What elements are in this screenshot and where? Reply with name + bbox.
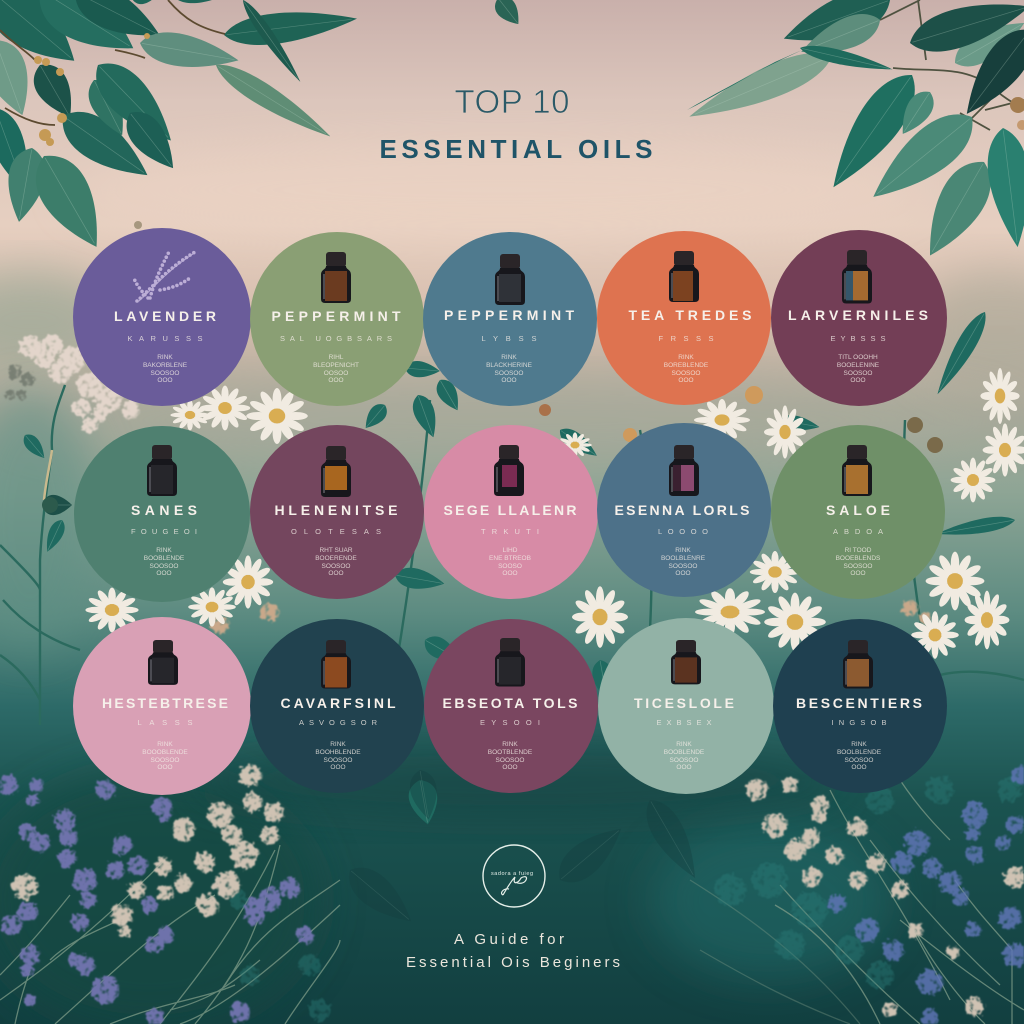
panel: Hestebtrese: RINK xyxy=(157,741,173,748)
panel: Sanes: SANES xyxy=(131,502,197,518)
panel: Cavarfsinl: SOOSOO xyxy=(324,757,352,764)
subtitle: Essential Ois Beginers xyxy=(406,954,620,971)
panel: Ebseota Tols: EYSOOI xyxy=(480,718,540,727)
panel: Ebseota Tols: EBSEOTA TOLS xyxy=(442,695,578,711)
panel: Bescentiers: BESCENTIERS xyxy=(796,695,922,711)
panel: Sege Llalenr: TRKUTI xyxy=(481,527,539,536)
panel: Peppermint green: OOSOO xyxy=(324,370,348,377)
panel: Bescentiers: BOOLBLENDE xyxy=(837,749,882,756)
panel: Ticeslole: TICESLOLE xyxy=(634,695,734,711)
panel: Tea Tree: OOO xyxy=(678,377,694,384)
panel: Saloe: RI TOOD xyxy=(845,547,872,554)
panel: Tea Tree: RINK xyxy=(678,354,694,361)
panel: Saloe: BOOEBLENDS xyxy=(836,555,881,562)
panel: Hlenenitse: OLOTESAS xyxy=(291,527,381,536)
panel: Saloe xyxy=(771,425,945,599)
panel: Lavender: KARUSSS xyxy=(128,334,202,343)
panel: Larverniles: LARVERNILES xyxy=(788,307,928,323)
panel: Peppermint green: RIHL xyxy=(329,354,344,361)
panel: Cavarfsinl: RINK xyxy=(330,741,346,748)
subtitle xyxy=(406,931,620,971)
panel: Cavarfsinl: OOO xyxy=(330,764,346,771)
logo: circular emblem: sadora a fuieg xyxy=(491,871,533,877)
icon: amber bottle xyxy=(321,640,351,688)
panel: Ebseota Tols: BOOTBLENDE xyxy=(488,749,533,756)
icon: plum label bottle xyxy=(494,445,524,496)
panel: Ebseota Tols xyxy=(424,619,598,793)
panel: Sanes: FOUGEOI xyxy=(131,527,197,536)
panel: Peppermint green: PEPPERMINT xyxy=(272,308,401,324)
panel: Peppermint blue: OOO xyxy=(501,377,517,384)
panel: Hestebtrese: LASSS xyxy=(138,718,192,727)
panel: Lavender xyxy=(73,228,251,406)
panel: Bescentiers xyxy=(773,619,947,793)
icon: amber bottle xyxy=(842,445,872,496)
panel: Hestebtrese: HESTEBTRESE xyxy=(102,695,228,711)
icon: black bottle xyxy=(147,445,177,496)
panel: Lavender: OOO xyxy=(157,377,173,384)
logo: circular emblem xyxy=(483,845,545,907)
icon: amber bottle xyxy=(669,251,699,302)
icon: amber label bottle xyxy=(321,446,351,497)
icon: dark bottle xyxy=(495,254,525,305)
panel: Saloe: SALOE xyxy=(826,502,890,518)
panel: Hestebtrese: BOOOBLENDE xyxy=(142,749,188,756)
panel: Cavarfsinl: CAVARFSINL xyxy=(280,695,396,711)
subtitle: A Guide for xyxy=(454,931,564,948)
panel: Hestebtrese: OOO xyxy=(157,764,173,771)
panel: Sege Llalenr: LIHD xyxy=(503,547,518,554)
panel: Ticeslole: RINK xyxy=(676,741,692,748)
panel: Larverniles: EYBSSS xyxy=(830,334,886,343)
panel: Peppermint green: OOO xyxy=(328,377,344,384)
panel: Cavarfsinl: ASVOGSOR xyxy=(299,718,378,727)
panel: Peppermint blue: LYBSS xyxy=(482,334,536,343)
icon: amber bottle xyxy=(321,252,351,303)
panel: Cavarfsinl: BOOHBLENDE xyxy=(315,749,361,756)
panel: Peppermint blue xyxy=(423,232,597,406)
panel: Lavender: LAVENDER xyxy=(114,308,216,324)
panel: Peppermint green: SAL UOGBSARS xyxy=(280,334,392,343)
panel: Peppermint blue: SOOSOO xyxy=(495,370,523,377)
foliage: top right leaves xyxy=(683,0,1024,267)
icon: amber bottle xyxy=(671,640,701,684)
panel: Bescentiers: RINK xyxy=(851,741,867,748)
panel: Saloe: OOO xyxy=(850,570,866,577)
panel: Peppermint green: BLEOPENICHT xyxy=(313,362,359,369)
icon: black bottle xyxy=(495,638,525,686)
foliage: lavender meadow with grasses at the bottom xyxy=(0,764,1024,1024)
panel: Tea Tree xyxy=(597,231,771,405)
panel: Tea Tree: TEA TREDES xyxy=(628,307,752,323)
panel: Sege Llalenr: SEGE LLALENR xyxy=(444,502,576,518)
panel: Lavender: RINK xyxy=(157,354,173,361)
foliage: top left leaves xyxy=(0,0,526,259)
panel: Larverniles: TITL OOOHH xyxy=(838,354,878,361)
panel: Sege Llalenr xyxy=(424,425,598,599)
foliage: middle garden of stems, leaves and daisies xyxy=(0,307,1024,827)
panel: Ebseota Tols: RINK xyxy=(502,741,518,748)
panel: Tea Tree: BOREBLENDE xyxy=(664,362,709,369)
panel: Peppermint blue: RINK xyxy=(501,354,517,361)
panel: Hestebtrese: SOOSOO xyxy=(151,757,179,764)
panel: Esenna Lorls: ESENNA LORLS xyxy=(614,502,750,518)
panel: Peppermint blue: BLACKHERINE xyxy=(486,362,533,369)
panel: Hlenenitse: OOO xyxy=(328,570,344,577)
title xyxy=(380,83,652,164)
panel: Hlenenitse: RHT SUAR xyxy=(319,547,353,554)
panel: Sanes: RINK xyxy=(156,547,172,554)
panel: Esenna Lorls: OOO xyxy=(675,570,691,577)
icon: black bottle xyxy=(148,640,178,685)
panel: Hestebtrese xyxy=(73,617,251,795)
icon: plum label bottle xyxy=(669,445,699,496)
title line: ESSENTIAL OILS: ESSENTIAL OILS xyxy=(380,134,652,164)
panel: Larverniles: OOO xyxy=(850,377,866,384)
panel: Sege Llalenr: OOO xyxy=(502,570,518,577)
panel: Sege Llalenr: ENE BTREOB xyxy=(489,555,531,562)
panel: Ebseota Tols: SOOSOO xyxy=(496,757,524,764)
panel: Ticeslole: BOOBLENDE xyxy=(664,749,705,756)
panel: Sanes: SOOSOO xyxy=(150,563,178,570)
panel: Tea Tree: FRSSS xyxy=(658,334,714,343)
panel: Saloe: SOOSOO xyxy=(844,563,872,570)
icon: amber bottle xyxy=(843,640,873,688)
panel: Sanes: OOO xyxy=(156,570,172,577)
icon: blue label bottle xyxy=(842,250,872,304)
panel: Lavender: BAKORBLENE xyxy=(143,362,188,369)
panel: Sege Llalenr: SOOSO xyxy=(498,563,522,570)
panel: Tea Tree: SOOSOO xyxy=(672,370,700,377)
panel: Ebseota Tols: OOO xyxy=(502,764,518,771)
panel: Lavender: SOOSOO xyxy=(151,370,179,377)
panel: Hlenenitse xyxy=(250,425,424,599)
panel: Ticeslole: OOO xyxy=(676,764,692,771)
panel: Hlenenitse: SOOSOO xyxy=(322,563,350,570)
panel: Bescentiers: SOOSOO xyxy=(845,757,873,764)
panel: Bescentiers: INGSOB xyxy=(832,718,886,727)
panel: Esenna Lorls: SOOSOO xyxy=(669,563,697,570)
panel: Ticeslole: EXBSEX xyxy=(656,718,712,727)
panel: Esenna Lorls: RINK xyxy=(675,547,691,554)
panel: Esenna Lorls xyxy=(597,423,771,597)
panel: Ticeslole xyxy=(598,618,774,794)
panel: Larverniles: BOOELENINE xyxy=(837,362,880,369)
panel: Cavarfsinl xyxy=(250,619,424,793)
panel: Sanes xyxy=(74,426,250,602)
panel: Hlenenitse: HLENENITSE xyxy=(274,502,398,518)
panel: Hlenenitse: BOOERENDE xyxy=(315,555,357,562)
panel: Larverniles: SOOSOO xyxy=(844,370,872,377)
panel: Sanes: BOOBLENDE xyxy=(144,555,185,562)
panel: Peppermint green xyxy=(250,232,424,406)
panel: Saloe: ABDOA xyxy=(833,527,883,536)
panel: Larverniles xyxy=(771,230,947,406)
panel: Bescentiers: OOO xyxy=(851,764,867,771)
panel: Esenna Lorls: BOOLBLENRE xyxy=(661,555,706,562)
panel: Peppermint blue: PEPPERMINT xyxy=(444,307,574,323)
panel: Esenna Lorls: LOOOO xyxy=(658,527,708,536)
panel: Ticeslole: SOOSOO xyxy=(670,757,698,764)
title line: TOP 10: TOP 10 xyxy=(454,83,570,120)
icon: lavender sprig xyxy=(134,250,195,301)
